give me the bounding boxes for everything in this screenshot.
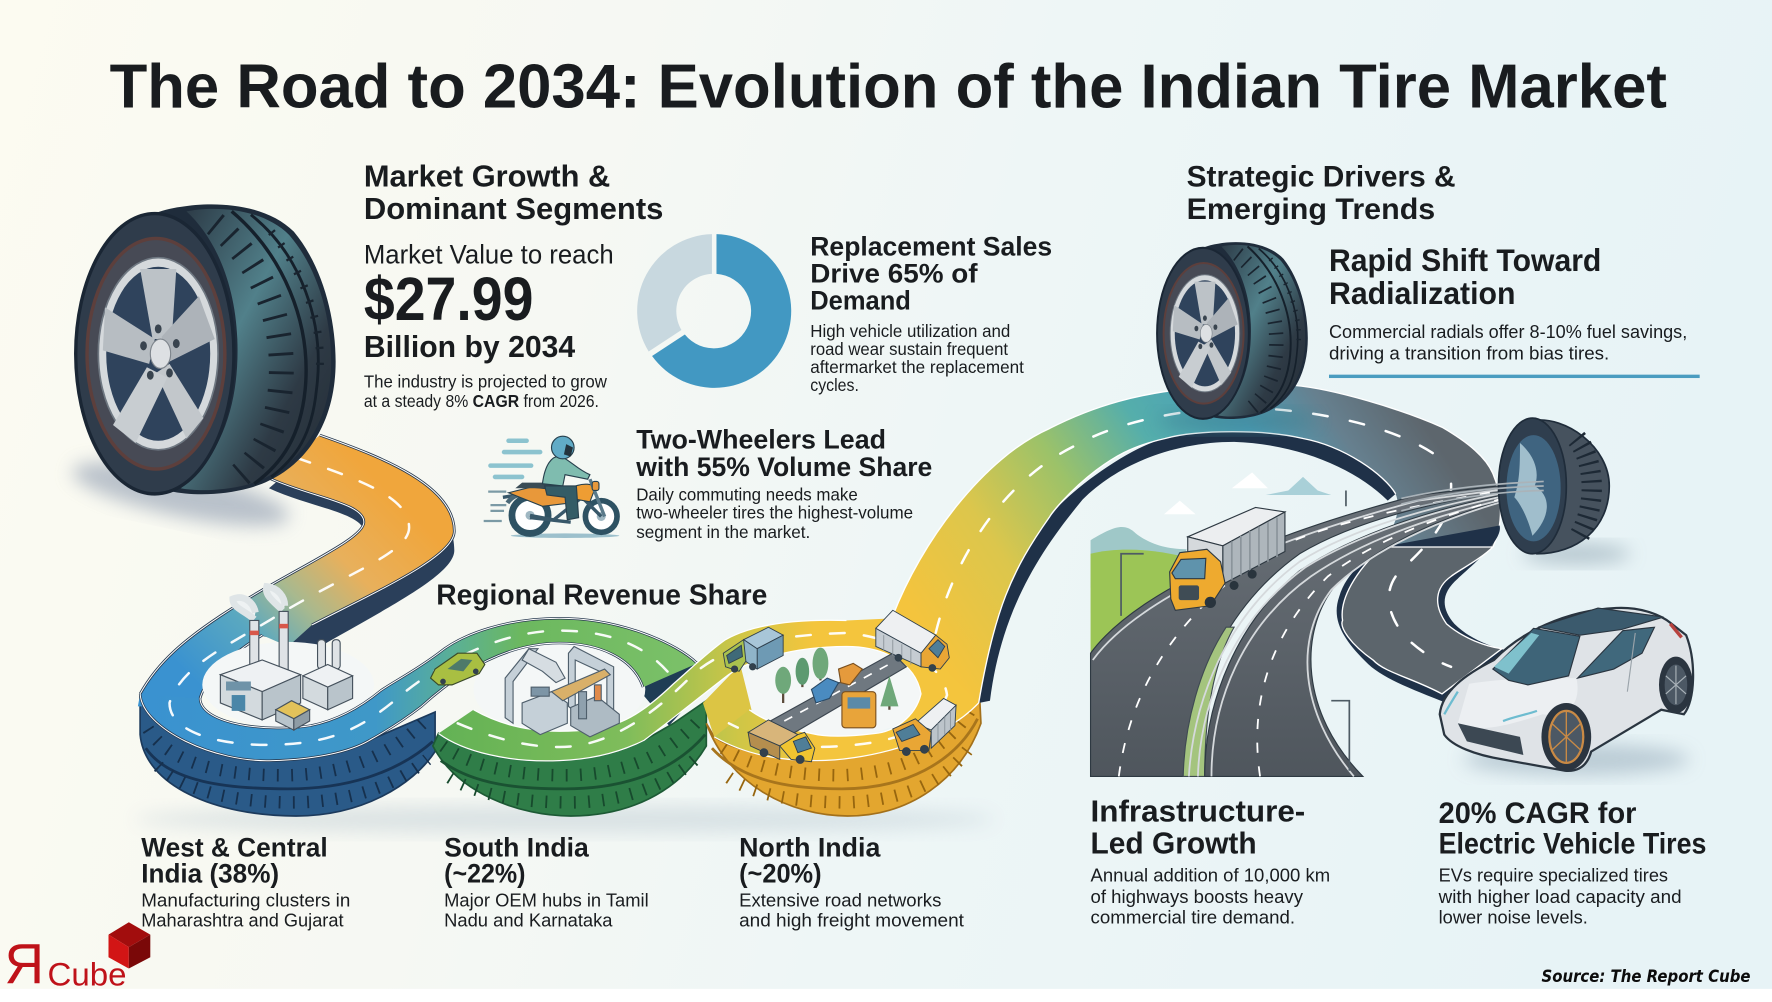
white pad: traffic (741, 646, 927, 737)
replacement sales text: High vehicle utilization and (810, 321, 1010, 341)
icon: electric car (1440, 608, 1693, 775)
road: S curve to EV (1342, 547, 1502, 694)
source note: Source: The Report Cube (1541, 966, 1751, 986)
white pad: factories (202, 642, 374, 728)
tread base: green (433, 701, 706, 816)
logo: RCube: Я (5, 932, 44, 995)
truck: lower right (893, 698, 956, 756)
ev text: lower noise levels. (1439, 907, 1588, 927)
road: orange to blue (138, 435, 454, 706)
market value stat: The industry is projected to grow (364, 372, 607, 392)
road surface (893, 384, 1500, 703)
ev text: Electric Vehicle Tires (1439, 827, 1706, 860)
region: south india: (~22%) (444, 858, 525, 889)
lane dashes (1119, 488, 1514, 776)
road: blue to green arch (140, 618, 697, 761)
two-wheelers text: with 55% Volume Share (635, 451, 932, 482)
region: south india (444, 832, 649, 931)
icon: factories (220, 587, 353, 730)
region: north india: (~20%) (739, 858, 822, 889)
icon: assembly machines (505, 646, 619, 737)
region: north india (739, 832, 964, 931)
infrastructure text: commercial tire demand. (1091, 907, 1295, 927)
ev text: EVs require specialized tires (1439, 866, 1668, 886)
road edge lines (893, 384, 1500, 703)
tread base: yellow (706, 678, 981, 816)
market value stat: Market Value to reach (364, 238, 614, 269)
ev text: with higher load capacity and (1438, 887, 1682, 907)
icon: freight truck (1170, 507, 1285, 610)
replacement sales text: Drive 65% of (810, 258, 979, 289)
ev text (1438, 797, 1706, 927)
region: north india: and high freight movement (739, 911, 964, 931)
main road: to highway and EV (893, 384, 1509, 703)
region: north india: North India (739, 832, 881, 863)
region: west and central india: Maharashtra and Gujarat (141, 911, 344, 931)
two-wheelers text: Daily commuting needs make (636, 485, 858, 505)
strategic drivers heading (1187, 160, 1456, 226)
icon: trucks on yellow road (723, 610, 956, 763)
strategic drivers heading: Emerging Trends (1187, 193, 1435, 226)
icon: car on road (431, 653, 485, 685)
ev text: 20% CAGR for (1439, 797, 1636, 830)
donut chart: 65% replacement (637, 234, 791, 388)
guard rails (1093, 485, 1538, 776)
highway left carriageway (1091, 481, 1538, 776)
replacement sales text: Demand (810, 285, 911, 316)
two-wheelers text: two-wheeler tires the highest-volume (636, 503, 913, 523)
right tire with highway emerging (1401, 418, 1631, 564)
region: south india: South India (444, 832, 590, 863)
market growth heading (364, 159, 663, 226)
logo: RCube: Cube (47, 955, 127, 992)
region: west and central india: India (38%) (141, 858, 279, 889)
infrastructure text: Annual addition of 10,000 km (1091, 866, 1330, 886)
market growth heading: Dominant Segments (364, 192, 663, 226)
icon: trees and traffic scene (766, 648, 906, 735)
replacement sales text: cycles. (810, 375, 859, 395)
radialization text: Radialization (1329, 275, 1515, 311)
market value stat: at a steady 8% CAGR from 2026. (364, 391, 599, 411)
small tire on road (1157, 242, 1317, 431)
truck: upper left (723, 627, 783, 672)
dark junction (639, 661, 712, 726)
market growth heading: Market Growth & (364, 159, 610, 193)
infrastructure text (1091, 795, 1330, 927)
icon: motorcycle (484, 436, 619, 538)
region: west and central india: West & Central (141, 832, 328, 863)
tread base: blue (140, 694, 435, 816)
infrastructure text: Infrastructure- (1091, 795, 1305, 829)
radialization text: Rapid Shift Toward (1329, 242, 1601, 278)
winding tire road: regional section (136, 435, 994, 833)
median (1183, 627, 1234, 776)
lamp post (1331, 490, 1349, 771)
highway scene (1091, 472, 1538, 776)
market value stat (364, 238, 614, 411)
radialization text (1329, 242, 1700, 378)
big tire (76, 204, 336, 494)
truck: upper right (876, 610, 949, 671)
highway right carriageway (1205, 488, 1538, 776)
dashes (936, 408, 1451, 667)
strategic drivers heading: Strategic Drivers & (1187, 160, 1456, 193)
radialization text: driving a transition from bias tires. (1329, 342, 1609, 363)
white pad: machines (474, 644, 645, 735)
region: north india: Extensive road networks (739, 890, 941, 910)
market value stat: $27.99 (364, 265, 533, 333)
regional revenue share heading: Regional Revenue Share (436, 579, 767, 611)
main road dark inner edge (979, 432, 1396, 703)
region: west and central india: Manufacturing clusters in (141, 890, 350, 910)
replacement sales text: road wear sustain frequent (810, 339, 1008, 359)
road shadow edge: S curve (1337, 526, 1509, 703)
replacement sales text: aftermarket the replacement (810, 357, 1024, 377)
title: The Road to 2034: Evolution of the Indian Tire Market (110, 52, 1667, 121)
road centre dashes (170, 458, 947, 747)
region: west and central india (141, 832, 350, 931)
infrastructure text: Led Growth (1091, 826, 1257, 860)
infrastructure text: of highways boosts heavy (1091, 887, 1303, 907)
truck: lower left (748, 720, 815, 763)
big tire shadow (68, 449, 294, 539)
two-wheelers text: Two-Wheelers Lead (636, 424, 886, 455)
logo: RCube (5, 922, 150, 995)
radialization text: Commercial radials offer 8-10% fuel savings, (1329, 321, 1687, 342)
market value stat: Billion by 2034 (364, 330, 575, 364)
road: yellow fill join (703, 665, 752, 737)
two-wheelers text (635, 424, 932, 542)
landscape (1091, 472, 1331, 667)
region: south india: Nadu and Karnataka (444, 911, 613, 931)
replacement sales text (810, 230, 1052, 395)
region: south india: Major OEM hubs in Tamil (444, 890, 649, 910)
replacement sales text: Replacement Sales (810, 230, 1052, 261)
road: green to yellow spiral (438, 616, 994, 761)
two-wheelers text: segment in the market. (636, 522, 810, 542)
